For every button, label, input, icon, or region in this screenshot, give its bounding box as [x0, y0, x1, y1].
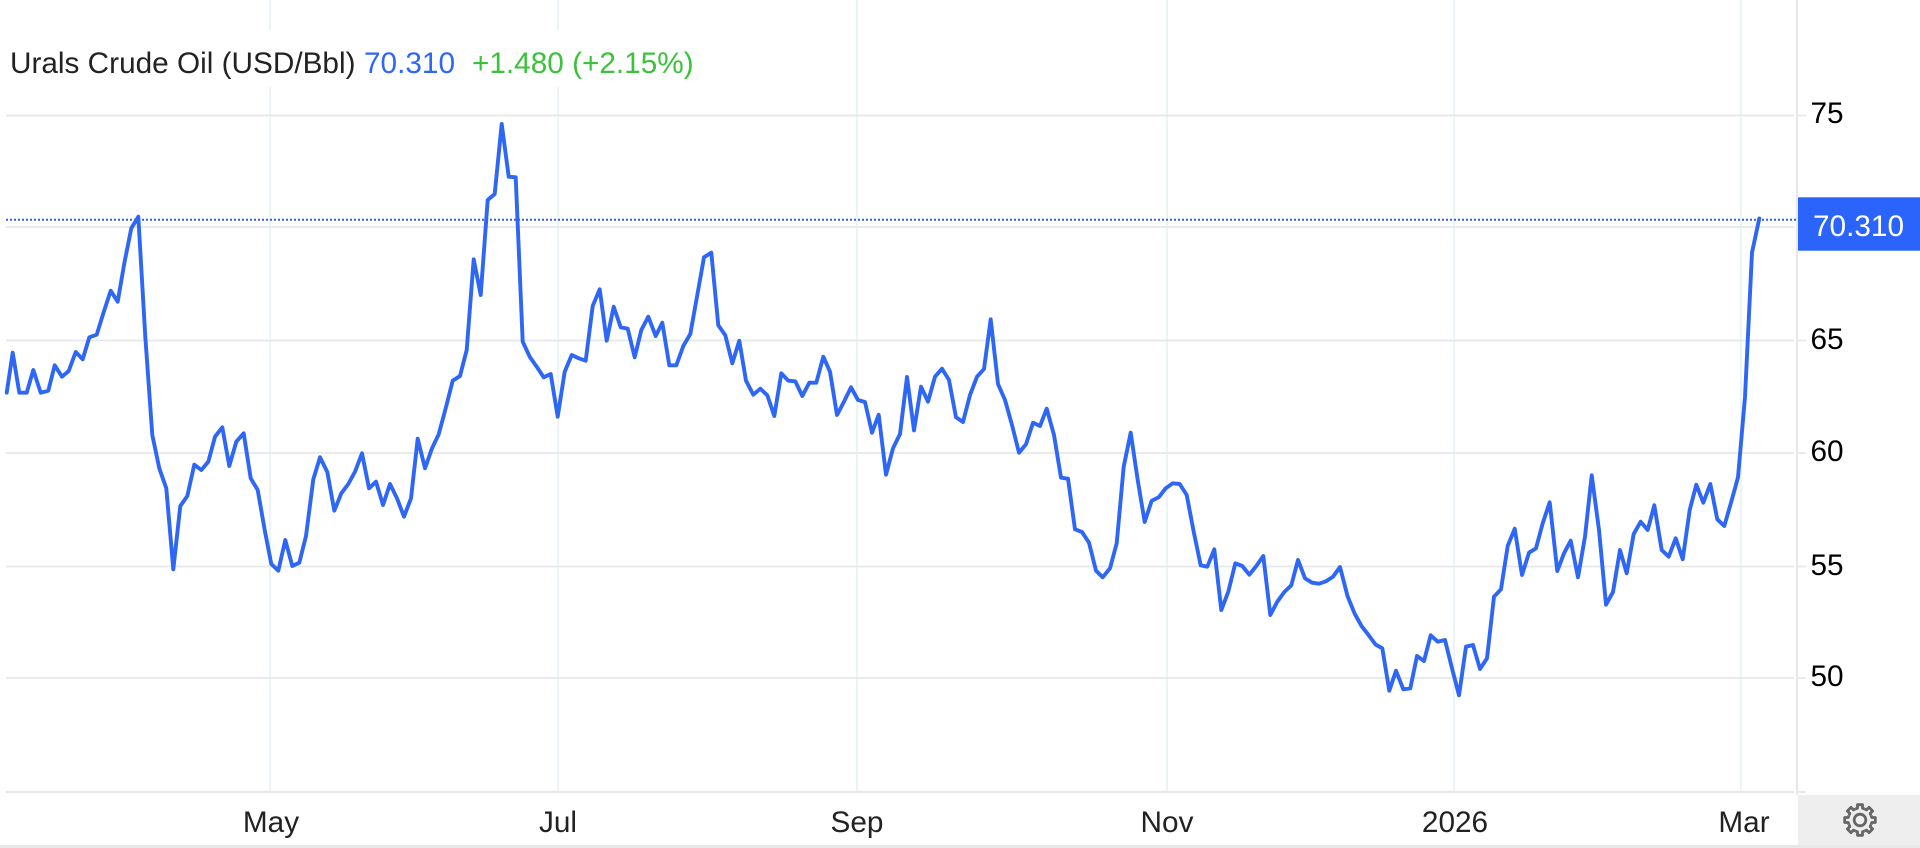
- current value: 70.310: [364, 47, 455, 80]
- title legend: [0, 30, 710, 87]
- x axis labels: 2026: [1422, 806, 1488, 839]
- current price tag: 70.310: [1813, 210, 1904, 243]
- x axis labels: Sep: [831, 806, 883, 839]
- x axis labels: Nov: [1141, 806, 1194, 839]
- current price tag: [1798, 197, 1920, 251]
- x axis labels: May: [243, 806, 299, 839]
- settings panel with gear icon: [1798, 795, 1920, 845]
- x axis labels: Jul: [539, 806, 577, 839]
- icon: gear: [1845, 805, 1875, 835]
- y axis labels: 55: [1810, 549, 1844, 582]
- x axis labels: [243, 806, 1770, 839]
- y axis labels: 60: [1810, 435, 1844, 468]
- price line series: [7, 124, 1759, 695]
- change: +1.480 (+2.15%): [472, 47, 694, 80]
- y axis labels: 50: [1810, 660, 1844, 693]
- current price dotted line: [6, 219, 1797, 221]
- instrument name: Urals Crude Oil (USD/Bbl): [10, 47, 356, 80]
- y axis labels: 75: [1810, 97, 1844, 130]
- y axis labels: 65: [1810, 323, 1844, 356]
- y axis labels: [1810, 97, 1844, 693]
- x axis labels: Mar: [1718, 806, 1770, 839]
